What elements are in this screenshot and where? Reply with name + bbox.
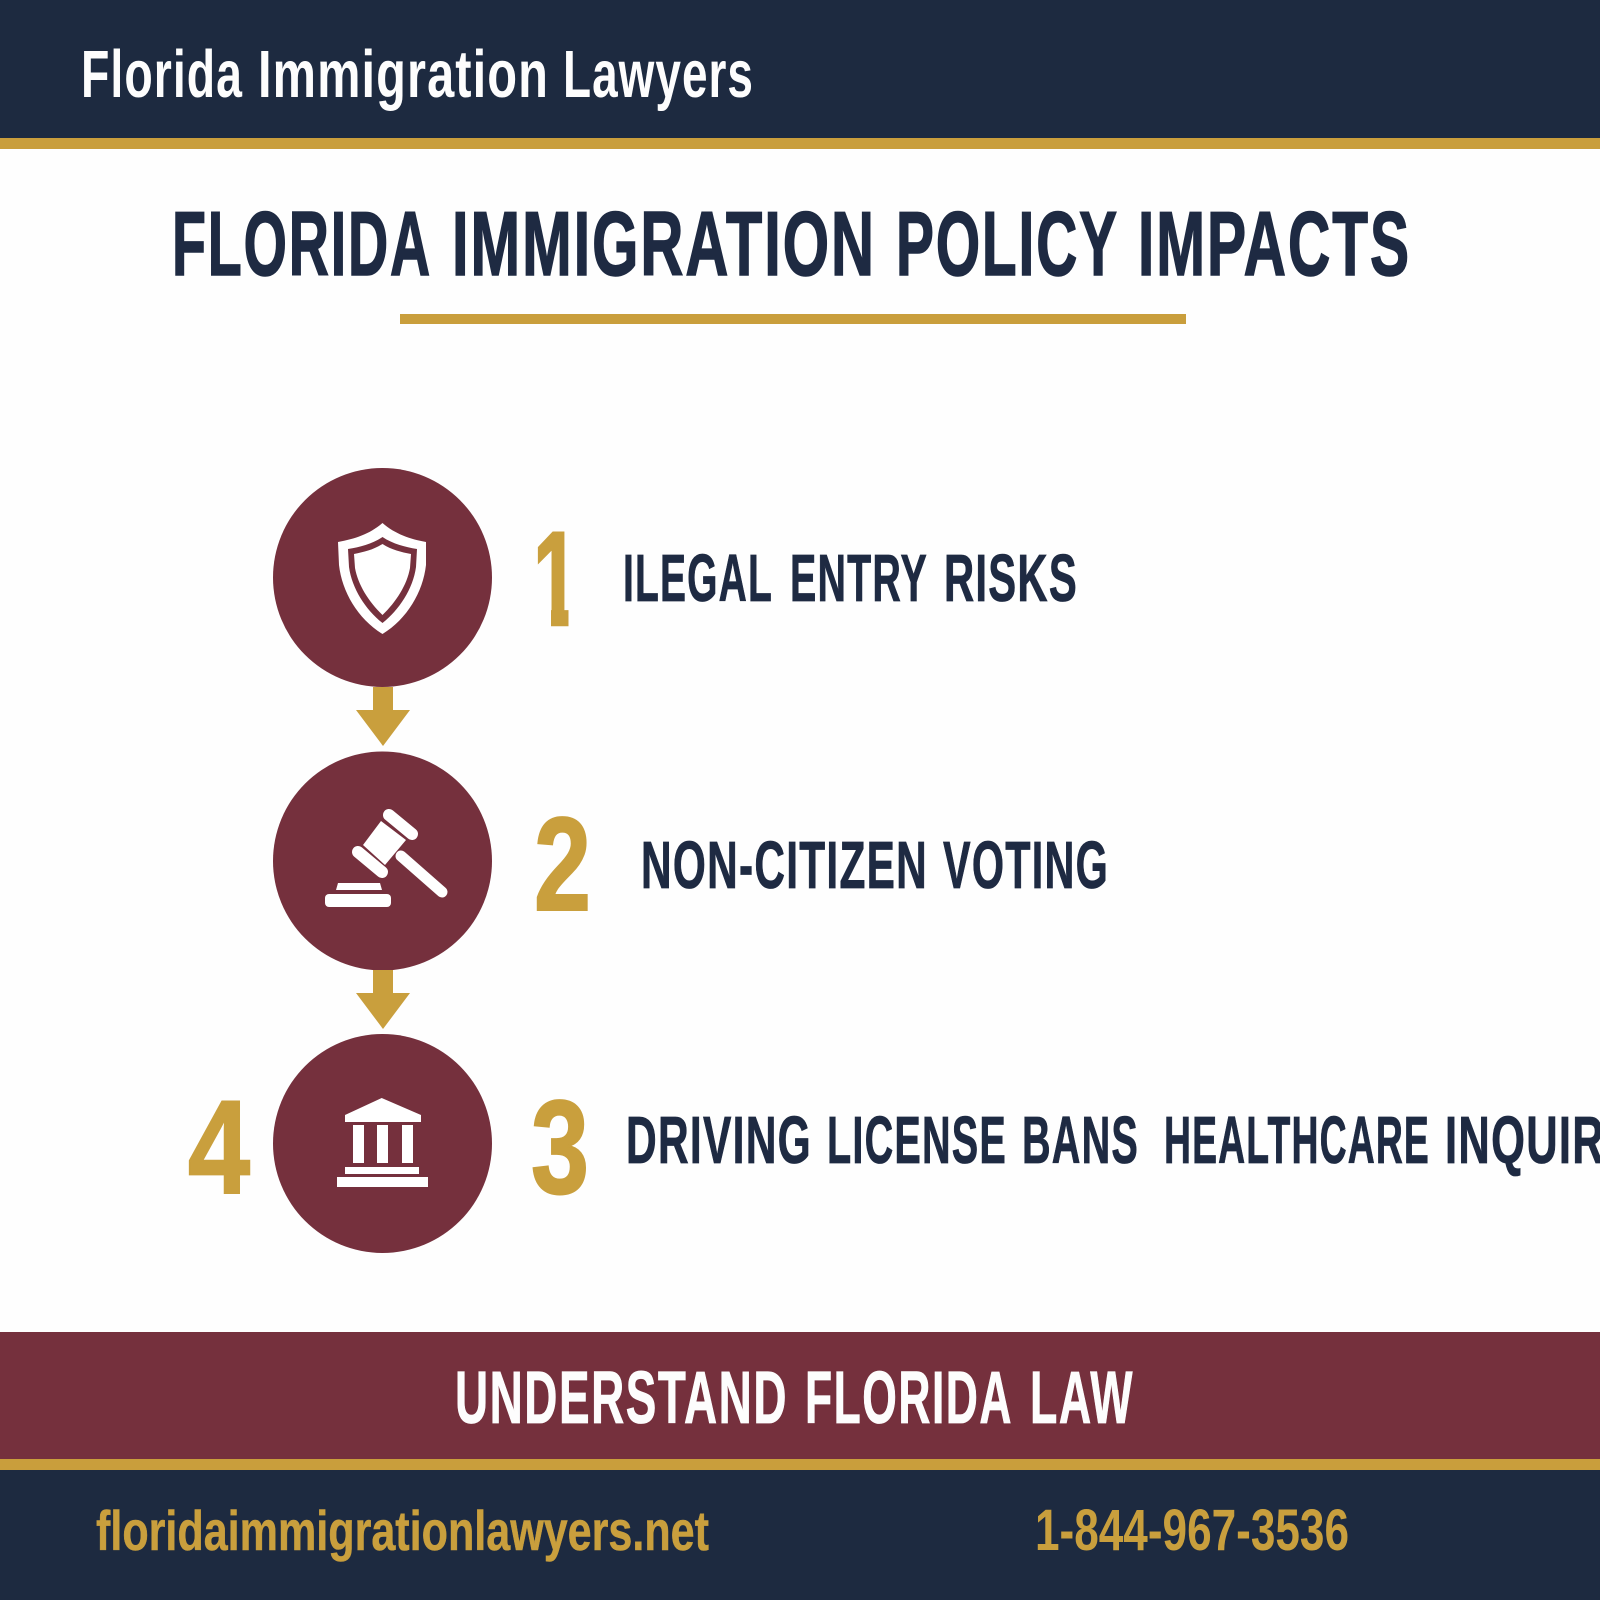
arrow 1 to 2: [356, 687, 410, 746]
step 1: [273, 468, 1078, 687]
label: non-citizen voting: VOTING: [943, 828, 1109, 903]
icon: shield: [273, 468, 492, 687]
label: driving license bans: [626, 1103, 1139, 1178]
step 3 and 4: [188, 1034, 1600, 1253]
firm name: Immigration: [258, 37, 549, 112]
call to action text: FLORIDA: [805, 1356, 1013, 1439]
icon: gavel: [273, 752, 492, 970]
call to action text: LAW: [1030, 1356, 1134, 1439]
step 2: [273, 752, 1109, 970]
title: IMPACTS: [1138, 194, 1411, 295]
firm name: Florida: [81, 37, 243, 112]
title: [172, 194, 1411, 295]
header band: [0, 0, 1600, 149]
title: POLICY: [896, 194, 1119, 295]
number 3: 3: [531, 1074, 589, 1222]
label: illegal entry risks: ILEGAL: [623, 541, 773, 616]
label: illegal entry risks: RISKS: [944, 541, 1078, 616]
label: driving license bans: LICENSE: [827, 1103, 1007, 1178]
call to action text: UNDERSTAND: [455, 1356, 788, 1439]
call to action band: [0, 1332, 1600, 1459]
title: IMMIGRATION: [452, 194, 876, 295]
title underline: [400, 314, 1186, 324]
label: driving license bans: DRIVING: [626, 1103, 812, 1178]
label: driving license bans: BANS: [1022, 1103, 1139, 1178]
label: non-citizen voting: NON-CITIZEN: [641, 828, 928, 903]
number 2: 2: [534, 791, 591, 939]
label: illegal entry risks: [623, 541, 1078, 616]
firm name: Lawyers: [563, 37, 754, 112]
title: FLORIDA: [172, 194, 432, 295]
website: floridaimmigrationlawyers.net: [96, 1499, 709, 1562]
number 1: 1: [533, 505, 579, 654]
arrow 2 to 3: [356, 970, 410, 1029]
phone: 1-844-967-3536: [1035, 1498, 1349, 1563]
number 4: 4: [188, 1074, 250, 1222]
label: illegal entry risks: ENTRY: [790, 541, 928, 616]
icon: courthouse: [273, 1034, 492, 1253]
number 1: [520, 505, 592, 654]
firm name: [81, 37, 754, 112]
footer band: [0, 1459, 1600, 1600]
